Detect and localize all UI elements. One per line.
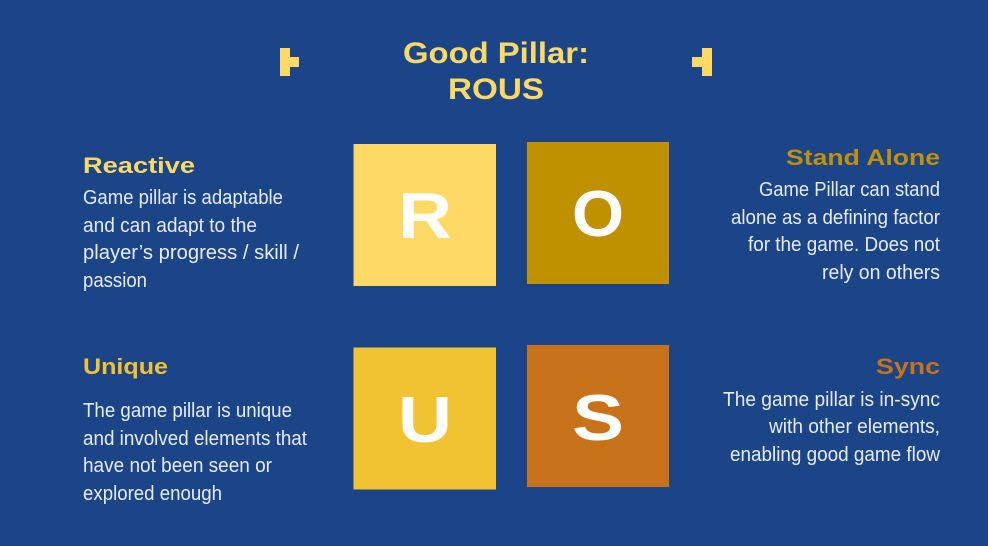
heading: Stand Alone: Stand Alone — [786, 145, 940, 170]
text block: Sync description: with other elements, — [768, 416, 940, 438]
text block: Stand Alone description: alone as a defining factor — [731, 207, 940, 229]
title — [403, 37, 589, 106]
panel: Reactive text — [83, 153, 299, 292]
title: ROUS — [448, 73, 544, 106]
tile: O: O — [572, 177, 624, 250]
tile: U: U — [398, 383, 452, 456]
text block: Unique description: and involved elements that — [83, 428, 307, 450]
tile: S: S — [572, 381, 624, 454]
text block: Stand Alone description — [731, 179, 940, 284]
tile: S — [527, 345, 669, 487]
tile: U — [354, 348, 496, 490]
title: Good Pillar: — [403, 37, 589, 70]
text block: Unique description: explored enough — [83, 483, 222, 505]
text block: Sync description: enabling good game flow — [730, 444, 941, 466]
text block: Unique description: The game pillar is unique — [83, 400, 292, 422]
text block: Unique description — [83, 400, 307, 505]
text block: Sync description: The game pillar is in-sync — [723, 389, 940, 411]
icon: left bracket — [280, 48, 299, 76]
tile: R: R — [398, 179, 452, 252]
text block: Reactive description: passion — [83, 270, 147, 292]
text block: Stand Alone description: Game Pillar can stand — [759, 179, 940, 201]
tile: O — [527, 142, 669, 284]
text block: Sync description — [723, 389, 941, 466]
tile: R — [354, 144, 496, 286]
text block: Stand Alone description: for the game. Does not — [748, 234, 940, 256]
panel: Sync text — [723, 354, 941, 466]
panel: Stand Alone text — [731, 145, 940, 284]
icon: right bracket — [692, 48, 712, 76]
heading: Sync: Sync — [876, 354, 940, 379]
heading: Reactive: Reactive — [83, 153, 195, 178]
panel: Unique text — [83, 354, 307, 505]
text block: Reactive description — [83, 187, 299, 292]
text block: Reactive description: Game pillar is adaptable — [83, 187, 283, 209]
text block: Reactive description: player’s progress / skill / — [83, 242, 299, 264]
text block: Stand Alone description: rely on others — [822, 262, 940, 284]
text block: Unique description: have not been seen or — [83, 455, 272, 477]
heading: Unique: Unique — [83, 354, 168, 379]
text block: Reactive description: and can adapt to the — [83, 215, 257, 237]
